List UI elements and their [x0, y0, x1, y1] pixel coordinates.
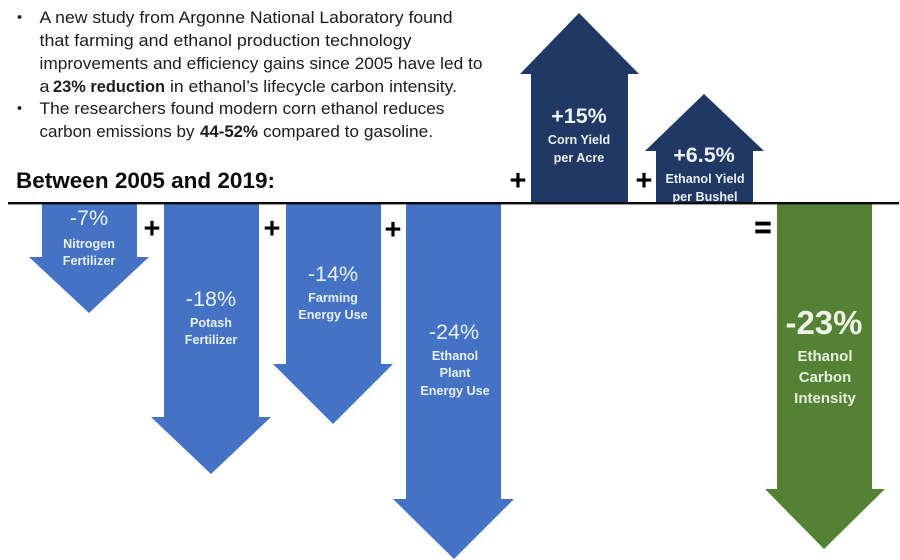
- bullet one: that farming and ethanol production technology: [40, 32, 412, 50]
- bullet two: [18, 100, 444, 141]
- arrow: ethanol yield per bushel: per Bushel: [672, 190, 738, 204]
- text block: study summary bullets: [18, 9, 482, 141]
- equals sign: =: [755, 212, 771, 244]
- arrow: ethanol carbon intensity: Intensity: [794, 390, 856, 407]
- arrow: ethanol carbon intensity: [765, 204, 885, 549]
- arrow: nitrogen fertilizer: Fertilizer: [63, 254, 115, 268]
- arrow: ethanol plant energy use: [393, 204, 514, 559]
- arrow: ethanol plant energy use: Plant: [440, 366, 471, 380]
- arrow: farming energy use: [273, 204, 393, 424]
- bullet one: [18, 9, 482, 96]
- arrow: nitrogen fertilizer: -7%: [70, 206, 108, 230]
- bullet one: 23% reduction: [53, 78, 165, 96]
- arrow: farming energy use: -14%: [308, 262, 358, 286]
- heading: Between 2005 and 2019:: [16, 168, 275, 193]
- arrow: ethanol plant energy use: Ethanol: [432, 349, 478, 363]
- bullet one: improvements and efficiency gains since 2005 have led to: [40, 55, 482, 73]
- arrow: corn yield per acre: +15%: [551, 104, 607, 128]
- arrow: nitrogen fertilizer: Nitrogen: [63, 237, 115, 251]
- arrow: corn yield per acre: [520, 13, 639, 203]
- arrow: farming energy use: Energy Use: [298, 308, 368, 322]
- arrow: corn yield per acre: per Acre: [554, 151, 604, 165]
- bullet two: carbon emissions by: [40, 123, 195, 141]
- bullet one: A new study from Argonne National Laboratory found: [40, 9, 452, 27]
- plus sign three: +: [385, 214, 401, 246]
- arrow: potash fertilizer: [151, 204, 271, 474]
- bullet two: compared to gasoline.: [263, 123, 433, 141]
- plus sign two: +: [264, 213, 280, 245]
- bullet two: 44-52%: [200, 123, 258, 141]
- plus sign one: +: [144, 213, 160, 245]
- arrow: ethanol carbon intensity: Ethanol: [798, 348, 852, 365]
- arrow: potash fertilizer: Fertilizer: [185, 333, 237, 347]
- bullet two: The researchers found modern corn ethanol reduces: [40, 100, 444, 118]
- bullet one: a: [40, 78, 50, 96]
- arrow: potash fertilizer: -18%: [186, 287, 236, 311]
- arrow: ethanol carbon intensity: Carbon: [799, 369, 851, 386]
- plus sign five: +: [636, 165, 652, 197]
- arrow: ethanol plant energy use: Energy Use: [420, 384, 490, 398]
- arrow: nitrogen fertilizer: [29, 204, 149, 313]
- arrow: ethanol yield per bushel: [645, 94, 764, 204]
- plus sign four: +: [510, 165, 526, 197]
- arrow: corn yield per acre: Corn Yield: [548, 133, 610, 147]
- arrow: ethanol yield per bushel: Ethanol Yield: [665, 172, 745, 186]
- arrow: farming energy use: Farming: [308, 291, 358, 305]
- bullet one: in ethanol’s lifecycle carbon intensity.: [170, 78, 457, 96]
- arrow: ethanol carbon intensity: -23%: [785, 304, 863, 341]
- arrow: ethanol yield per bushel: +6.5%: [673, 143, 735, 167]
- baseline axis: [8, 202, 899, 204]
- arrow: potash fertilizer: Potash: [190, 316, 232, 330]
- arrow: ethanol plant energy use: -24%: [429, 320, 479, 344]
